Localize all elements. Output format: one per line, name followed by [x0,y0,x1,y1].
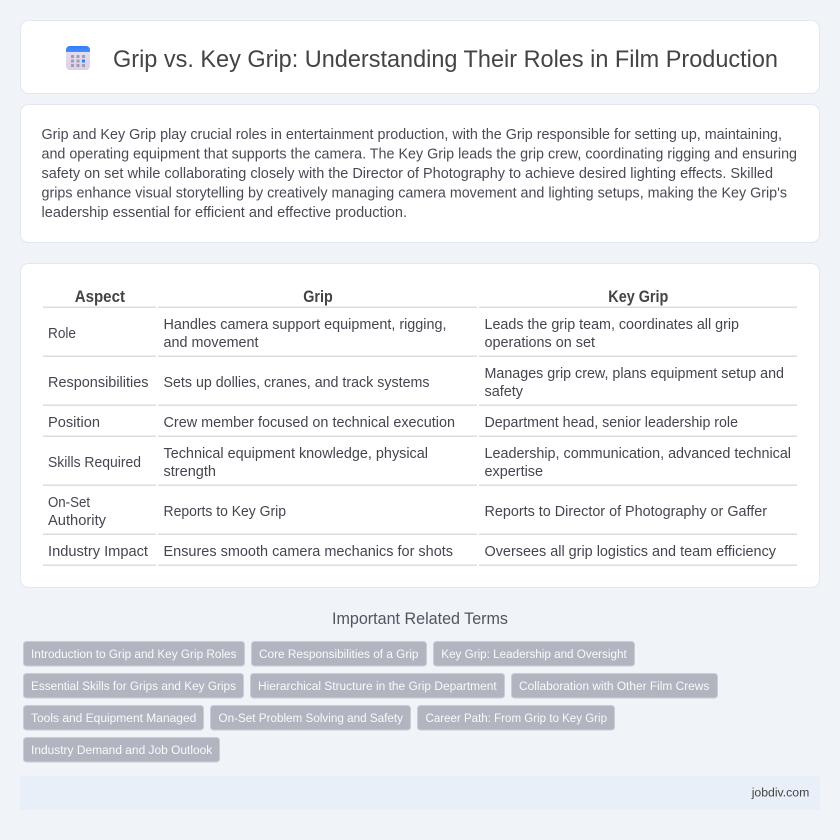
title: Grip vs. Key Grip: Understanding Their Roles in Film Production [113,46,778,73]
tag: Core Responsibilities of a Grip [259,647,419,661]
table header row: Key Grip [608,288,668,306]
table row: Role: Handles camera support equipment, rigging, [164,317,446,333]
tag: Tools and Equipment Managed [31,711,196,725]
table row: Role: operations on set [484,335,595,351]
table row: On-Set Authority: On-Set [48,495,90,511]
table row: Responsibilities: Manages grip crew, plans equipment setup and [484,366,784,382]
text block: introduction paragraph: Grip and Key Grip play crucial roles in entertainment production, with the Grip responsible for setting up, maintaining, [42,127,782,143]
table row: Position [48,415,738,431]
table row: Position: Position [48,415,100,431]
table row: Role: and movement [164,335,258,351]
icon: calendar [66,46,90,70]
tag [24,642,244,666]
table row: On-Set Authority: Authority [48,513,107,529]
table row: Responsibilities: Sets up dollies, cranes, and track systems [164,375,430,391]
panel: comparison table [20,264,820,588]
text block: introduction paragraph: safety on set while collaborating closely with the Director of Photography to achieve desired lighting effects. Skilled [42,166,773,182]
tag [210,706,410,730]
table row: Skills Required: Skills Required [48,455,141,471]
tag: Industry Demand and Job Outlook [31,743,213,757]
table header row: Grip [303,288,333,306]
tag [252,642,426,666]
table row: On-Set Authority: Reports to Director of Photography or Gaffer [484,504,767,520]
table row: Skills Required: Leadership, communication, advanced technical [484,446,791,462]
table row: Responsibilities [48,366,784,400]
table row: Skills Required: Technical equipment knowledge, physical [164,446,428,462]
tag [24,706,204,730]
table row: Role: Role [48,326,76,342]
text block: introduction paragraph [42,127,797,221]
text block: introduction paragraph: and operating equipment that supports the camera. The Key Grip leads the grip crew, coordinating rigging and ensuring [42,146,797,162]
table header row [75,288,668,306]
tag [512,674,718,698]
table row: Skills Required: expertise [484,464,543,480]
table row: Industry Impact: Industry Impact [48,544,148,560]
table row: Industry Impact [48,544,777,560]
tag: Introduction to Grip and Key Grip Roles [31,647,236,661]
table row: Position: Department head, senior leadership role [484,415,738,431]
table row: Role [48,317,739,351]
tag: Hierarchical Structure in the Grip Department [258,679,497,693]
text block: introduction paragraph: grips enhance visual storytelling by creatively managing camera movement and lighting setups, making the Key Grip's [42,186,787,202]
tag [418,706,614,730]
tag [24,738,220,762]
table row: Skills Required: strength [164,464,216,480]
panel: header [20,20,820,94]
footer [20,776,820,810]
table row: Industry Impact: Ensures smooth camera mechanics for shots [164,544,453,560]
tag [24,674,244,698]
tag [250,674,504,698]
table row: Skills Required [48,446,791,480]
heading: related terms: Important Related Terms [332,610,508,628]
tag: On-Set Problem Solving and Safety [218,711,404,725]
table row: On-Set Authority [48,495,767,529]
table row: Position: Crew member focused on technical execution [164,415,455,431]
tag: Key Grip: Leadership and Oversight [441,647,627,661]
table row: Responsibilities: safety [484,384,524,400]
tag: Collaboration with Other Film Crews [519,679,709,693]
tag: Career Path: From Grip to Key Grip [426,711,607,725]
text block: introduction paragraph: leadership essential for efficient and effective production. [42,205,407,221]
table row: Industry Impact: Oversees all grip logistics and team efficiency [484,544,777,560]
panel: introduction [20,104,820,242]
table header row: Aspect [75,288,125,306]
table row: Role: Leads the grip team, coordinates all grip [484,317,739,333]
tag: Essential Skills for Grips and Key Grips [31,679,236,693]
table row: On-Set Authority: Reports to Key Grip [164,504,286,520]
table row: Responsibilities: Responsibilities [48,375,148,391]
tag list: related terms [24,642,718,762]
tag [434,642,634,666]
footer: site name: jobdiv.com [751,786,809,800]
